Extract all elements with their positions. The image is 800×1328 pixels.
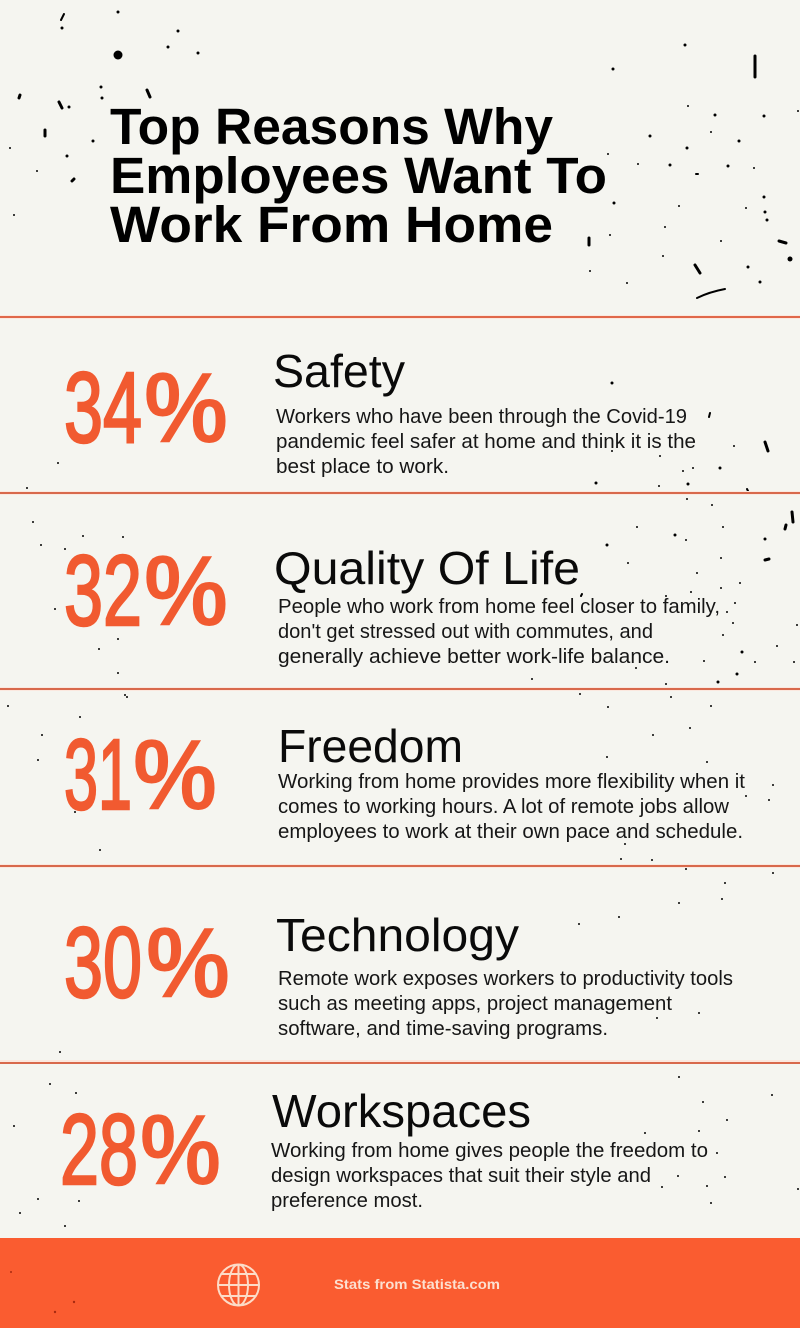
text: freedom description: employees to work at their own pace and schedule. <box>278 820 743 843</box>
stat: 30%: 30 <box>64 907 142 1019</box>
title: Top Reasons Why <box>110 98 554 155</box>
footer band <box>0 1238 800 1328</box>
stat: 28% <box>60 1094 221 1206</box>
stat: 31%: 31 <box>64 719 132 831</box>
text: freedom description: Working from home provides more flexibility when it <box>278 770 745 793</box>
text: technology description: software, and time-saving programs. <box>278 1017 608 1040</box>
panel: technology <box>64 907 733 1040</box>
heading: freedom: Freedom <box>278 720 463 772</box>
row dividers <box>0 315 800 1064</box>
text: freedom description <box>278 770 745 843</box>
text: technology description: such as meeting apps, project management <box>278 992 672 1015</box>
text: workspaces description: preference most. <box>271 1189 423 1212</box>
text: freedom description: comes to working hours. A lot of remote jobs allow <box>278 795 729 818</box>
stat: 34%: % <box>144 352 228 464</box>
title: Work From Home <box>110 196 553 253</box>
heading: workspaces: Workspaces <box>272 1085 531 1137</box>
stat: 28%: % <box>140 1094 221 1206</box>
text: technology description <box>278 967 733 1040</box>
text: workspaces description: design workspaces that suit their style and <box>271 1164 651 1187</box>
icon: globe <box>218 1264 259 1306</box>
text: workspaces description: Working from home gives people the freedom to <box>271 1139 708 1162</box>
panel: quality of life <box>64 535 720 668</box>
stat: 34% <box>64 352 228 464</box>
text: quality of life description: generally achieve better work-life balance. <box>278 645 670 668</box>
stat: 32% <box>64 535 228 647</box>
title: Employees Want To <box>110 147 607 204</box>
text: safety description: Workers who have been through the Covid-19 <box>276 405 687 428</box>
panel: freedom <box>64 719 745 843</box>
panel: workspaces <box>60 1085 708 1212</box>
panel: safety <box>64 345 696 478</box>
text: quality of life description: People who work from home feel closer to family, <box>278 595 720 618</box>
text: technology description: Remote work exposes workers to productivity tools <box>278 967 733 990</box>
stat: 30%: % <box>146 907 230 1019</box>
text: workspaces description <box>271 1139 708 1212</box>
stat: 32%: % <box>144 535 228 647</box>
stat: 34%: 34 <box>64 352 142 464</box>
text: quality of life description <box>278 595 720 668</box>
stat: 28%: 28 <box>60 1094 138 1206</box>
text: safety description: pandemic feel safer at home and think it is the <box>276 430 696 453</box>
heading: technology: Technology <box>276 909 519 961</box>
heading: quality of life: Quality Of Life <box>274 542 580 594</box>
stat: 30% <box>64 907 230 1019</box>
stat: 31%: % <box>133 719 217 831</box>
text: safety description <box>276 405 696 478</box>
heading: safety: Safety <box>273 345 405 397</box>
stat: 32%: 32 <box>64 535 142 647</box>
text: safety description: best place to work. <box>276 455 449 478</box>
source text: Stats from Statista.com <box>334 1277 500 1292</box>
text: quality of life description: don't get stressed out with commutes, and <box>278 620 653 643</box>
title <box>110 98 607 253</box>
